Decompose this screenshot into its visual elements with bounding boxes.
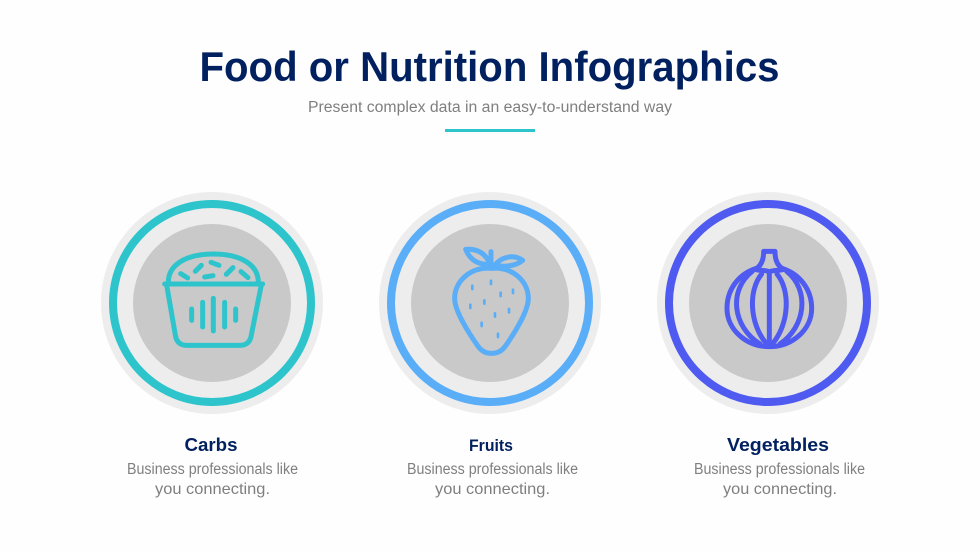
panel: carbs [101, 192, 323, 498]
heading: fruits: Fruits [469, 436, 513, 455]
heading: carbs: Carbs [184, 435, 238, 455]
description: carbs: Business professionals like [127, 461, 298, 478]
heading: vegetables: Vegetables [727, 435, 829, 455]
circle badge: fruits [379, 192, 601, 414]
description: vegetables: Business professionals like [694, 461, 865, 478]
icon: muffin [165, 254, 263, 345]
icon: onion [727, 251, 812, 347]
description: fruits [407, 461, 578, 498]
panel: fruits [379, 192, 601, 498]
description: carbs [127, 461, 298, 498]
description: vegetables [694, 461, 865, 498]
title: Food or Nutrition Infographics [200, 43, 780, 90]
panel: vegetables [657, 192, 879, 498]
icon: strawberry [455, 249, 528, 353]
description: fruits: you connecting. [435, 481, 550, 498]
description: vegetables: you connecting. [723, 481, 837, 498]
description: fruits: Business professionals like [407, 461, 578, 478]
title accent line [445, 129, 535, 132]
circle badge: carbs [101, 192, 323, 414]
description: carbs: you connecting. [155, 481, 270, 498]
subtitle: Present complex data in an easy-to-understand way [308, 99, 672, 116]
circle badge: vegetables [657, 192, 879, 414]
